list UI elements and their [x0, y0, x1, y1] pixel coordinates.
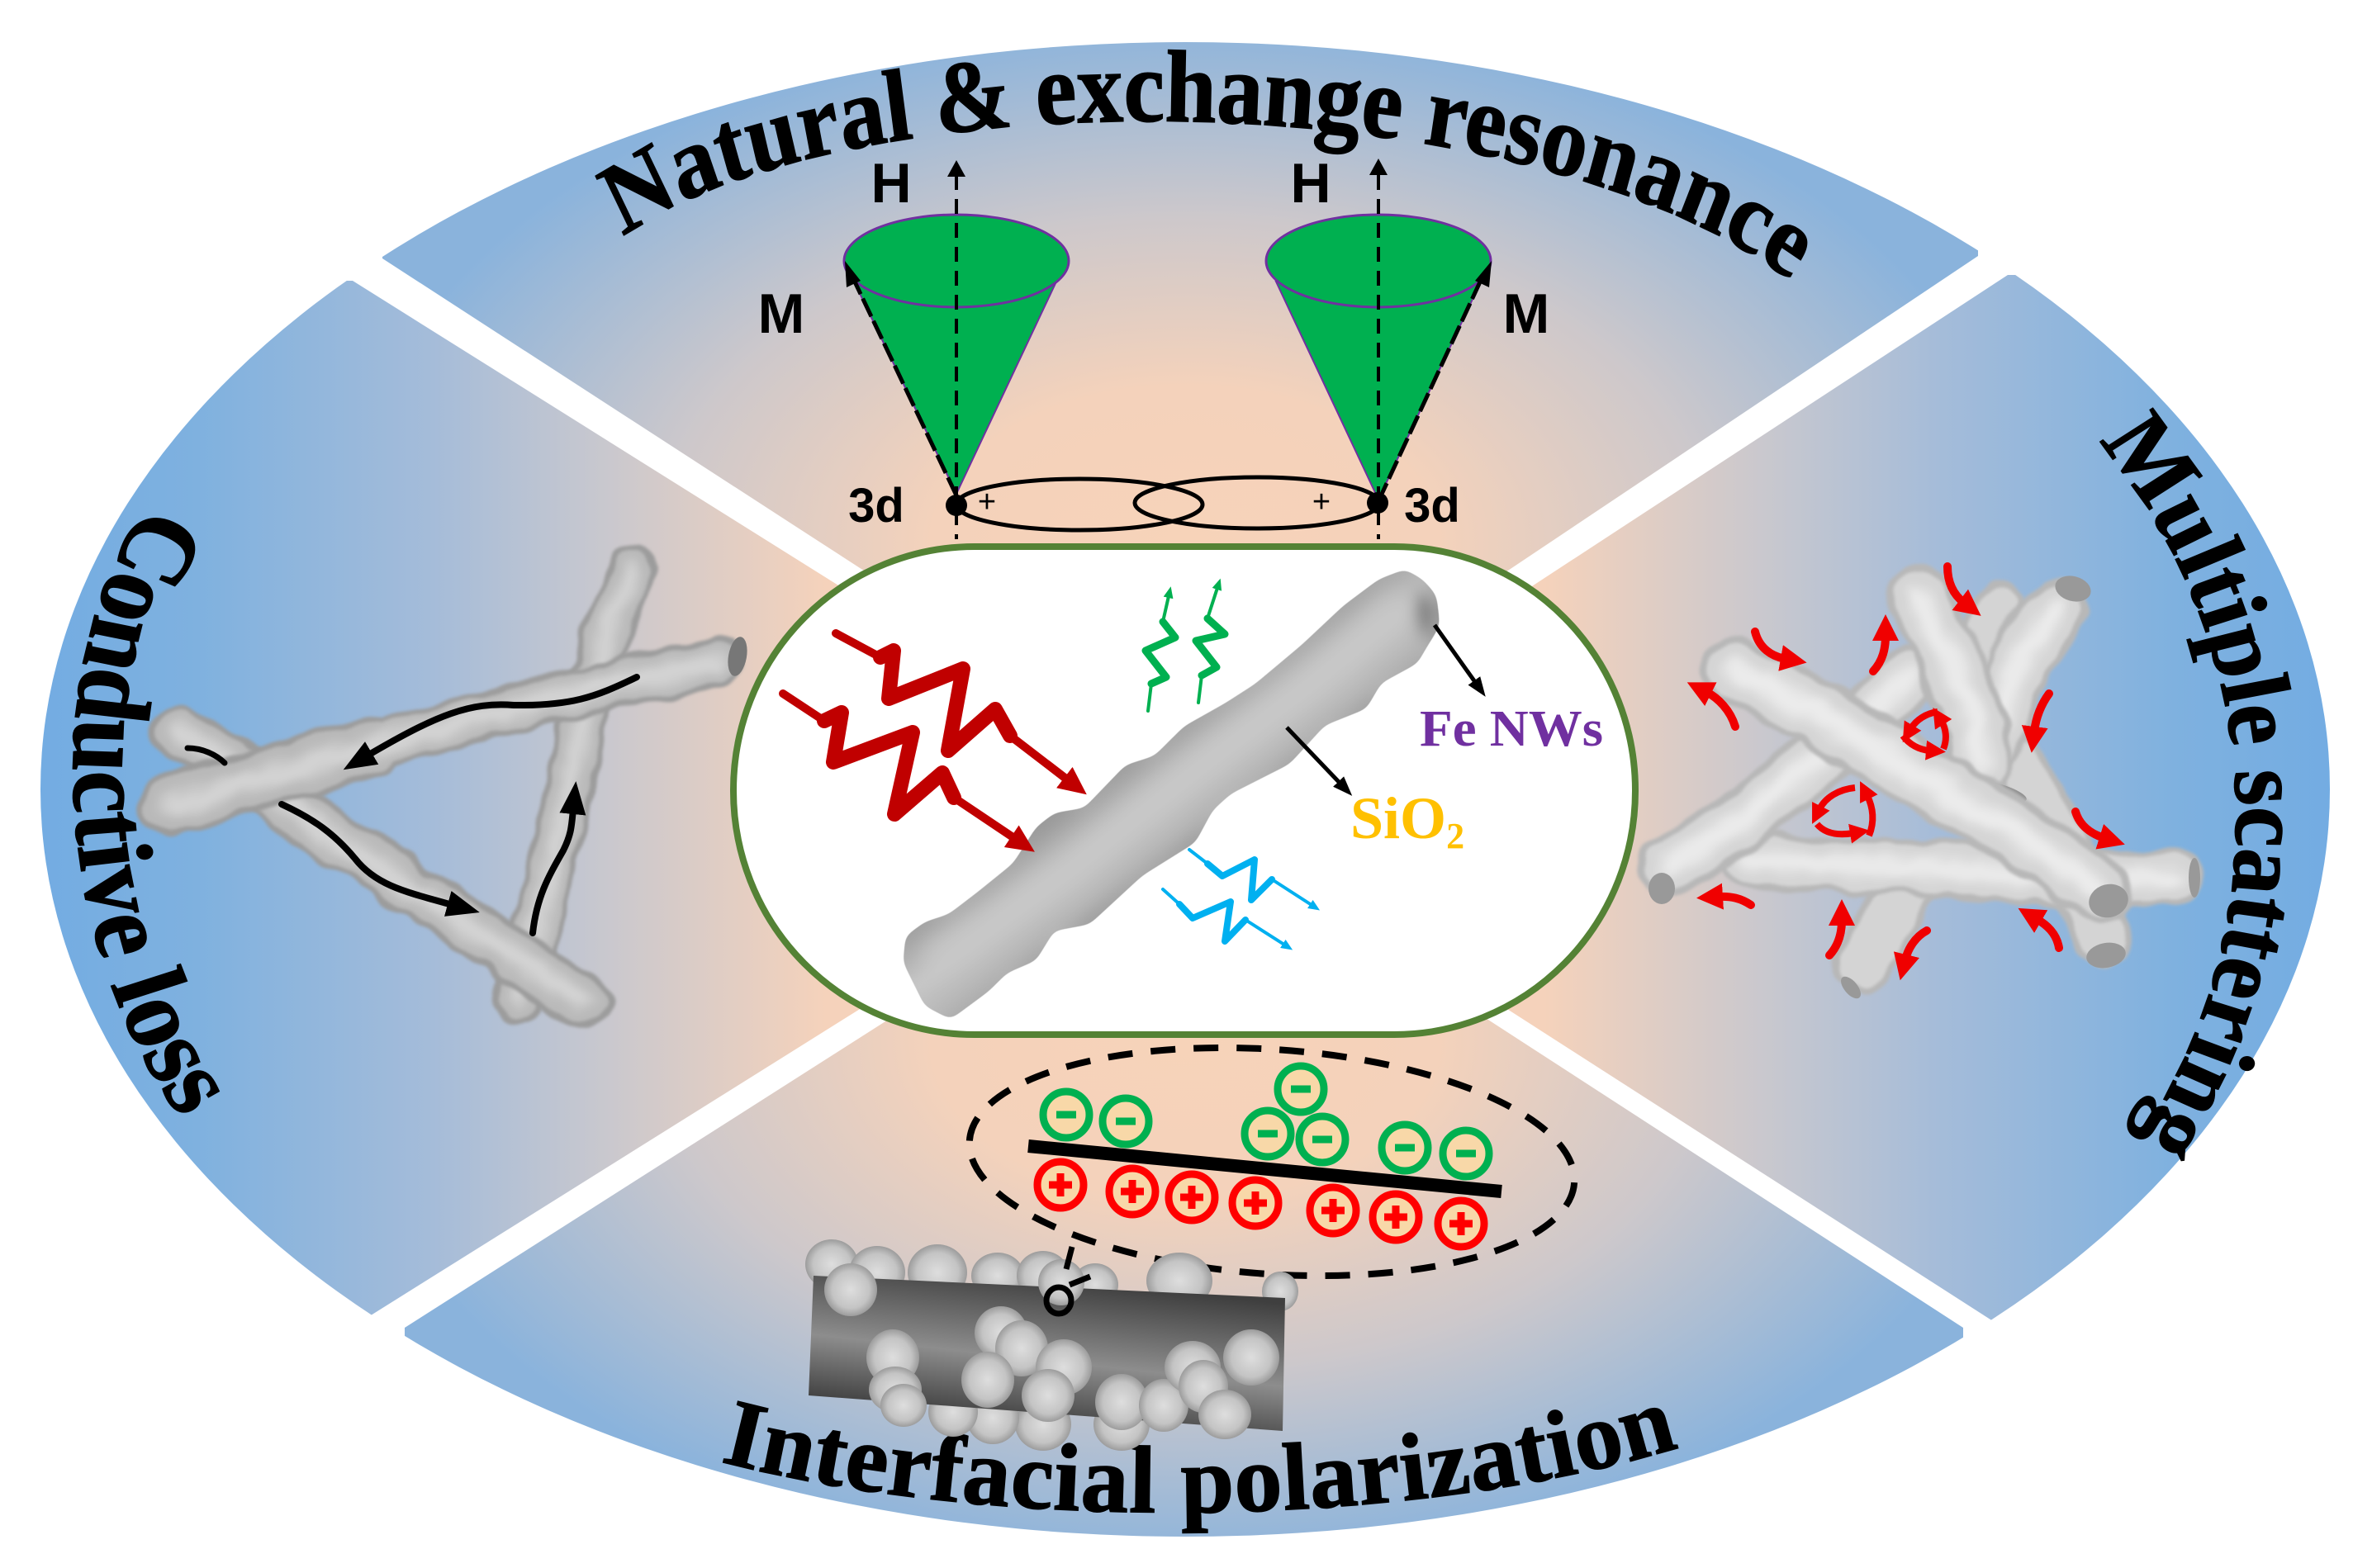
icon: right green cone [1266, 215, 1491, 500]
nanowire: right lower [2019, 765, 2102, 941]
panel: conductive loss [40, 281, 860, 1315]
cylinder [809, 1276, 1285, 1431]
diagram: central nanowire [783, 570, 1603, 1019]
nanowire body [904, 570, 1439, 1019]
icon: right atom [1367, 492, 1388, 514]
icon: left green cone [844, 215, 1069, 494]
diagram: scattering nanowire network [1649, 566, 2200, 1002]
nanowire: left rising [1670, 675, 1911, 867]
heading: conductive loss: Conductive loss [73, 518, 220, 1113]
arrow: left M vector [845, 261, 956, 495]
label: SiO2: 2 [1446, 816, 1464, 856]
nanowire: upper centre [1918, 596, 1979, 764]
nanowire: upper long [169, 662, 719, 805]
heading: natural and exchange resonance: Natural & exchange resonance [595, 50, 1807, 277]
nanowire: lower back [1862, 884, 1907, 966]
label: Fe NWs: Fe NWs [1420, 701, 1603, 757]
dashed callout ellipse [961, 1029, 1582, 1295]
orbital: right lobe [1135, 477, 1379, 528]
arrow: to SiO2 label [1287, 727, 1340, 783]
positive charges [1037, 1162, 1484, 1247]
diagram: conductive nanowire network [169, 570, 750, 1001]
label: right plus: + [1312, 485, 1331, 519]
label: 3d right: 3d [1404, 479, 1460, 533]
label: H left: H [871, 152, 912, 215]
label: M right: M [1503, 282, 1549, 345]
diagram: interfacial charge ellipse [961, 1029, 1582, 1295]
spheres on cylinder [824, 1259, 1279, 1439]
panel: multiple scattering [1508, 275, 2330, 1319]
nanowire: upper right pair [1995, 607, 2057, 735]
spheres behind cylinder [805, 1239, 1298, 1451]
interface bar [1028, 1146, 1501, 1191]
orbital: left lobe [956, 479, 1203, 530]
zoom locator ring [1046, 1287, 1071, 1314]
arrow: current stub [187, 748, 225, 763]
arrow: right M vector [1378, 261, 1492, 501]
arrow: left H field [947, 160, 965, 539]
icon: left atom [946, 495, 967, 516]
panel: central stadium [733, 547, 1635, 1035]
heading: interfacial polarization: Interfacial polarization [722, 1400, 1679, 1534]
diagram: cylinder with SiO2 spheres [805, 1239, 1298, 1451]
label: H right: H [1290, 152, 1331, 215]
label: left plus: + [978, 485, 996, 519]
arrow: to Fe NWs label [1435, 625, 1475, 682]
nanowire end caps [1649, 572, 2200, 1002]
nanowire: horizontal [1747, 860, 2172, 879]
nanowire: short back [1967, 607, 2000, 661]
panel: interfacial polarization [405, 1019, 1963, 1537]
panel: natural and exchange resonance [382, 42, 1978, 571]
nanowire: lower diagonal [178, 731, 582, 1001]
nanowire: long diagonal [1736, 670, 2098, 890]
arrow: current along diagonal wire [282, 804, 453, 905]
heading: multiple scattering: Multiple scattering [2099, 407, 2291, 1161]
nanowire crease shadow [1961, 775, 2028, 808]
arrows: scattered red rays [1706, 566, 2104, 959]
locator leader lines [1066, 1247, 1090, 1285]
arrows: incident red waves [783, 633, 1067, 838]
arrow: current along top wire [368, 677, 637, 756]
label: 3d left: 3d [848, 479, 904, 533]
arrows: reflected green waves [1146, 588, 1225, 711]
label: SiO2: SiO [1350, 785, 1446, 851]
arrows: transmitted blue waves [1163, 850, 1312, 945]
nanowire: vertical [518, 570, 633, 999]
label: M left: M [758, 282, 804, 345]
arrow: right H field [1369, 159, 1388, 539]
nanowire end cap [725, 635, 750, 678]
arrows: internal cycle lower [1817, 788, 1872, 836]
arrow: current along vertical wire [533, 809, 573, 933]
negative charges [1043, 1066, 1489, 1177]
diagram: magnetic spin cones [758, 152, 1549, 539]
arrows: internal cycle upper [1903, 712, 1946, 751]
